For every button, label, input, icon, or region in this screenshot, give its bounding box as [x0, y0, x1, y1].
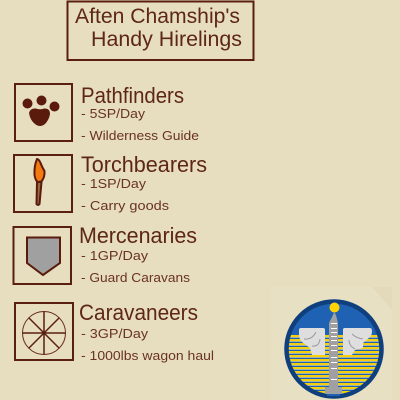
text: caravaneers cost: - 3GP/Day	[81, 326, 149, 341]
icon: torch	[14, 155, 72, 212]
text: mercenaries cost: - 1GP/Day	[81, 248, 149, 263]
panel: caravaneers	[15, 300, 214, 363]
icon: shield	[14, 227, 71, 284]
heading: caravaneers: Caravaneers	[79, 300, 198, 325]
text: mercenaries role: - Guard Caravans	[81, 270, 191, 285]
text: caravaneers role: - 1000lbs wagon haul	[81, 348, 214, 363]
title: Handy Hirelings	[91, 28, 242, 51]
panel: pathfinders	[15, 83, 199, 143]
panel: torchbearers	[14, 152, 207, 213]
panel: mercenaries	[14, 223, 197, 285]
text: pathfinders cost: - 5SP/Day	[81, 106, 146, 121]
heading: mercenaries: Mercenaries	[79, 223, 197, 248]
icon: wagon wheel	[15, 303, 73, 360]
text: torchbearers role: - Carry goods	[81, 198, 170, 213]
text: torchbearers cost: - 1SP/Day	[81, 176, 147, 191]
emblem: lighthouse seal	[284, 299, 384, 399]
heading: pathfinders: Pathfinders	[81, 83, 184, 108]
text: pathfinders role: - Wilderness Guide	[81, 128, 199, 143]
heading: torchbearers: Torchbearers	[81, 152, 207, 177]
title	[68, 2, 254, 60]
title: Aften Chamship's	[75, 5, 240, 28]
icon: paw print	[15, 84, 72, 141]
